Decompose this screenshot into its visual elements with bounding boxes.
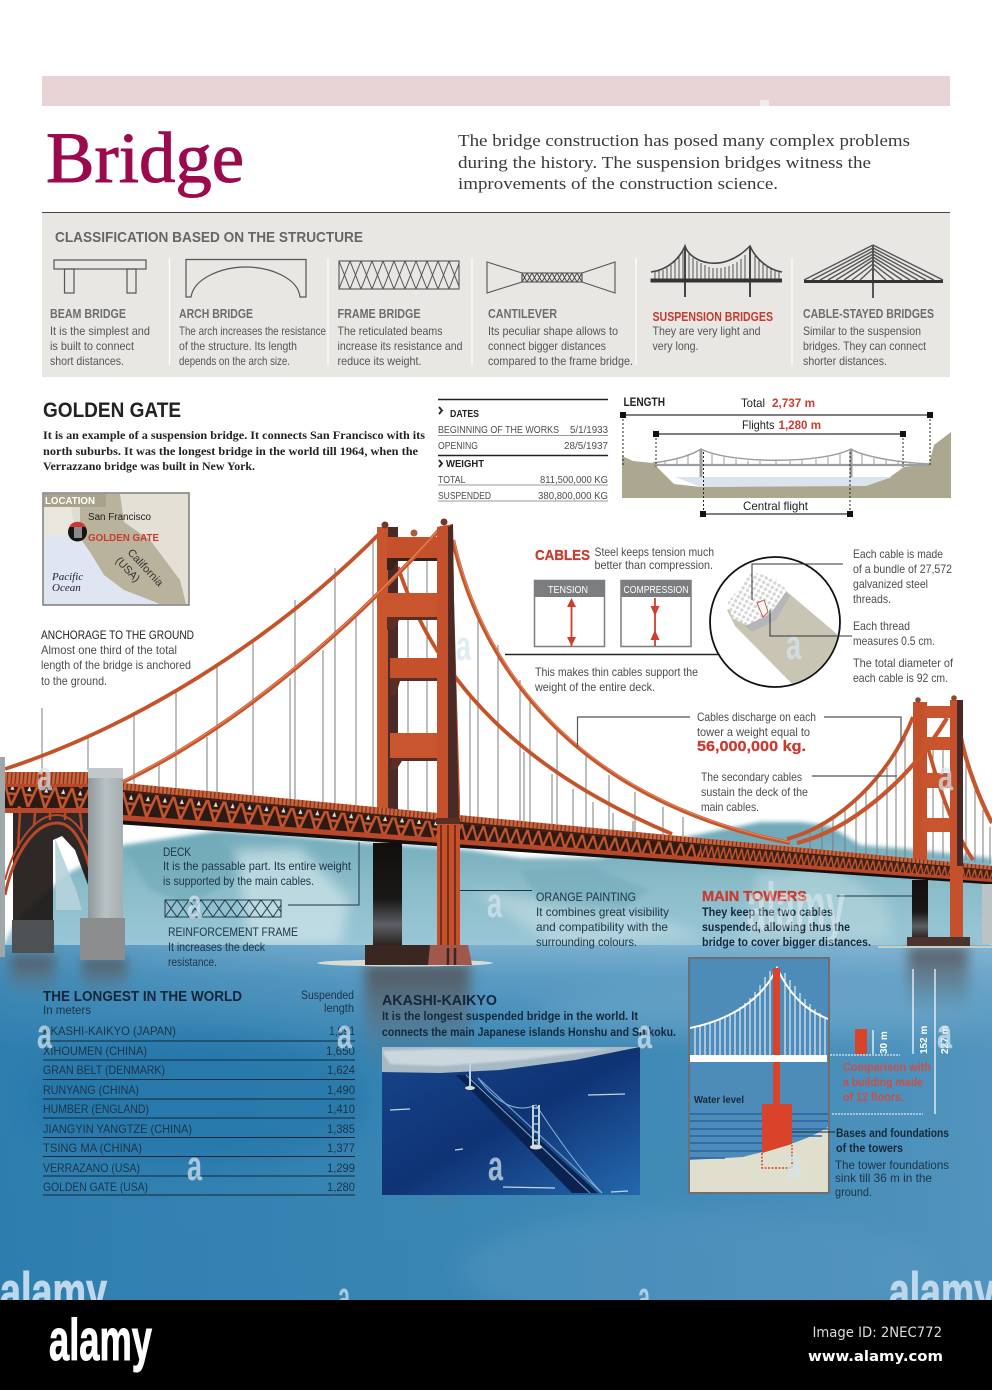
- watermarks: a: [337, 1010, 352, 1057]
- water band: [675, 477, 892, 487]
- watermarks: a: [938, 752, 953, 799]
- panel: cables: better than compression.: [594, 558, 713, 572]
- location map: (USA): [113, 555, 142, 585]
- row: jiangyin yangtze: JIANGYIN YANGTZE (CHINA): [43, 1122, 192, 1136]
- chart: length of the bridge: 1,280 m: [778, 418, 821, 432]
- row: verrazano: 1,299: [327, 1161, 355, 1175]
- row: akashi-kaikyo: AKASHI-KAIKYO (JAPAN): [43, 1024, 176, 1038]
- table: dates and weight: TOTAL: [438, 474, 466, 486]
- callout: main towers: [702, 888, 912, 949]
- callout: main towers: MAIN TOWERS: [702, 888, 807, 905]
- location map: GOLDEN GATE: [88, 532, 159, 544]
- text: cable-stayed bridges: Similar to the suspension: [803, 324, 921, 338]
- row: runyang: RUNYANG (CHINA): [43, 1083, 139, 1097]
- text: cable-stayed bridges: CABLE-STAYED BRIDGES: [803, 307, 934, 321]
- comparison caption: of 12 floors.: [843, 1090, 904, 1104]
- far right anchorage pier: [982, 884, 992, 944]
- intro text: The bridge construction has posed many complex problems: [458, 131, 910, 150]
- table: dates and weight: OPENING: [438, 440, 478, 452]
- row: humber: [43, 1102, 355, 1116]
- table: dates and weight: DATES: [450, 408, 479, 420]
- main cable: [690, 968, 828, 1028]
- text: cable composition: measures 0.5 cm.: [853, 634, 935, 648]
- illustration: golden gate bridge: [0, 518, 992, 966]
- text: anchorage to the ground: to the ground.: [41, 674, 107, 688]
- text: reinforcement frame: It increases the deck: [168, 940, 266, 954]
- map label: location: LOCATION: [45, 495, 95, 507]
- panel: cables: [505, 545, 954, 694]
- text: reinforcement frame: resistance.: [168, 955, 217, 969]
- callout: bases and foundations: The tower foundations: [835, 1158, 949, 1172]
- text: frame bridge: The reticulated beams: [338, 324, 442, 338]
- table: dates and weight: BEGINNING OF THE WORKS: [438, 424, 559, 436]
- table: the longest in the world: In meters: [43, 1003, 91, 1017]
- callout: bases and foundations: Bases and foundations: [836, 1126, 949, 1140]
- golden gate description: Verrazzano bridge was built in New York.: [43, 459, 255, 473]
- table: dates and weight: 28/5/1937: [564, 440, 608, 452]
- right tower front leg: [878, 695, 992, 948]
- row: tsing ma: 1,377: [327, 1141, 355, 1155]
- row: gran belt: GRAN BELT (DENMARK): [43, 1063, 165, 1077]
- golden gate description: [43, 428, 425, 473]
- watermarks: a: [338, 1273, 350, 1320]
- watermarks: a: [937, 1010, 952, 1057]
- text: akashi-kaikyo: [382, 993, 676, 1039]
- row: xihoumen: 1,650: [326, 1044, 355, 1058]
- row: tsing ma: TSING MA (CHINA): [43, 1141, 142, 1155]
- row: jiangyin yangtze: 1,385: [327, 1122, 355, 1136]
- footer image id: Image ID: 2NEC772: [812, 1325, 942, 1341]
- callout: main towers: suspended, allowing thus the: [702, 920, 850, 934]
- text: cantilever: compared to the frame bridge.: [488, 354, 633, 368]
- text: akashi-kaikyo: It is the longest suspended bridge in the world. It: [382, 1009, 638, 1023]
- callout: secondary cables: sustain the deck of the: [701, 785, 808, 799]
- watermarks: a: [786, 621, 801, 668]
- row: golden gate: GOLDEN GATE (USA): [43, 1180, 148, 1194]
- panel: cables: Steel keeps tension much: [594, 545, 714, 559]
- suspender cables: [695, 971, 825, 1055]
- row: golden gate: 1,280: [327, 1180, 355, 1194]
- callout: secondary cables: [701, 770, 897, 814]
- terrain profile: [622, 432, 951, 498]
- intro text: improvements of the construction science.: [458, 174, 778, 193]
- text: anchorage to the ground: [41, 628, 194, 688]
- icon: beam bridge: [54, 260, 146, 293]
- row: verrazano: VERRAZANO (USA): [43, 1161, 140, 1175]
- callout: orange painting: [460, 890, 669, 949]
- row: gran belt: 1,624: [327, 1063, 355, 1077]
- chart: length of the bridge: LENGTH: [624, 395, 665, 409]
- table: dates and weight: WEIGHT: [446, 458, 485, 470]
- near main cables: [123, 527, 992, 843]
- watermarks: [0, 621, 992, 1322]
- location map: Pacific: [51, 571, 83, 583]
- text: suspension bridges: SUSPENSION BRIDGES: [652, 310, 773, 324]
- text: suspension bridges: [652, 310, 773, 353]
- callout: orange painting: surrounding colours.: [536, 935, 637, 949]
- tension box: [534, 580, 605, 646]
- panel: classification based on the structure: [42, 212, 950, 377]
- text: beam bridge: is built to connect: [50, 339, 135, 353]
- text: anchorage to the ground: length of the bridge is anchored: [41, 658, 191, 672]
- comparison of heights: [830, 969, 951, 1114]
- text: cable composition: galvanized steel: [853, 577, 928, 591]
- comparison of heights: 30 m: [879, 1031, 890, 1054]
- text: cable composition: of a bundle of 27,572: [853, 562, 952, 576]
- text: cable-stayed bridges: shorter distances.: [803, 354, 887, 368]
- compression box: COMPRESSION: [624, 585, 688, 596]
- watermarks: alamy: [747, 869, 845, 945]
- watermarks: a: [637, 1010, 652, 1057]
- row: gran belt: [43, 1063, 355, 1077]
- chart: length of the bridge: Total: [741, 396, 765, 410]
- callout: deck: [163, 842, 359, 905]
- tension box: TENSION: [548, 585, 588, 596]
- text: arch bridge: [179, 307, 326, 368]
- text: reinforcement frame: REINFORCEMENT FRAME: [168, 925, 298, 939]
- right tower struts: [922, 706, 954, 832]
- location map: [43, 493, 189, 605]
- row: humber: 1,410: [327, 1102, 355, 1116]
- callout: main towers: bridge to cover bigger distances.: [702, 935, 871, 949]
- table: the longest in the world: Suspended: [301, 988, 354, 1002]
- watermarks: a: [638, 1273, 650, 1320]
- golden gate description: north suburbs. It was the longest bridge in the world till 1964, when the: [43, 444, 419, 458]
- text: akashi-kaikyo: connects the main Japanese islands Honshu and Shikoku.: [382, 1025, 676, 1039]
- label: water level: Water level: [694, 1094, 744, 1106]
- text: anchorage to the ground: ANCHORAGE TO THE GROUND: [41, 628, 194, 642]
- callout: deck: It is the passable part. Its entire weight: [163, 859, 352, 873]
- callout: secondary cables: main cables.: [701, 800, 759, 814]
- callout: orange painting: ORANGE PAINTING: [536, 890, 636, 904]
- row: verrazano: [43, 1161, 355, 1175]
- text: cable-stayed bridges: [803, 307, 934, 368]
- inset: tower foundations diagram: [689, 958, 829, 1193]
- chart: length of the bridge: [620, 395, 951, 517]
- text: arch bridge: depends on the arch size.: [179, 354, 290, 368]
- callout: deck: DECK: [163, 845, 191, 859]
- photo: akashi-kaikyo bridge: [382, 1047, 640, 1195]
- callout: deck: is supported by the main cables.: [163, 874, 314, 888]
- cables heading: CABLES: [535, 547, 590, 564]
- row: akashi-kaikyo: [43, 1024, 355, 1038]
- text: anchorage to the ground: Almost one third of the total: [41, 643, 177, 657]
- table: dates and weight: 811,500,000 KG: [540, 474, 608, 486]
- text: reinforcement frame: [168, 925, 298, 969]
- watermarks: a: [187, 1142, 202, 1189]
- callout: cables discharge: Cables discharge on each: [697, 710, 816, 724]
- water level lines: [690, 1114, 828, 1158]
- text: cable composition: The total diameter of: [853, 656, 954, 670]
- icon: cable-stayed bridge: [804, 245, 943, 298]
- comparison of heights: 227 m: [940, 1026, 951, 1054]
- text: cable composition: Each thread: [853, 619, 910, 633]
- callout: bases and foundations: of the towers: [836, 1141, 903, 1155]
- building block: [855, 1029, 867, 1054]
- watermarks: a: [37, 1010, 52, 1057]
- far tower leg, main tower: [373, 522, 402, 945]
- row: akashi-kaikyo: 1,991: [329, 1024, 355, 1038]
- chart: length of the bridge: 2,737 m: [772, 396, 815, 410]
- callout: main towers: They keep the two cables: [702, 905, 833, 919]
- callout: cables discharge: tower a weight equal to: [697, 725, 810, 739]
- callout: bases and foundations: [792, 1126, 949, 1199]
- footer bar: [0, 1300, 992, 1390]
- text: cantilever: connect bigger distances: [488, 339, 606, 353]
- row: xihoumen: [43, 1044, 355, 1058]
- deck: [690, 1055, 827, 1062]
- text: frame bridge: FRAME BRIDGE: [338, 307, 420, 321]
- watermarks: a: [456, 622, 471, 669]
- anchorage arch span: [0, 757, 125, 960]
- text: thin cables: weight of the entire deck.: [534, 680, 655, 694]
- text: cable composition: Each cable is made: [853, 547, 943, 561]
- background scene: mountains and water: [0, 822, 992, 1330]
- panel heading: CLASSIFICATION BASED ON THE STRUCTURE: [55, 229, 363, 246]
- icon: arch bridge: [186, 260, 306, 297]
- table: dates and weight: [438, 400, 608, 502]
- right tower back leg: [912, 697, 928, 938]
- watermarks: a: [487, 879, 502, 926]
- cable cross section: [710, 557, 852, 692]
- table: the longest in the world: [43, 988, 355, 1195]
- text: frame bridge: [338, 307, 462, 368]
- text: akashi-kaikyo: AKASHI-KAIKYO: [382, 993, 497, 1009]
- text: suspension bridges: very long.: [652, 339, 698, 353]
- table: the longest in the world: THE LONGEST IN THE WORLD: [43, 989, 242, 1005]
- watermarks: a: [787, 1140, 802, 1187]
- ground: [690, 1127, 828, 1192]
- text: cantilever: Its peculiar shape allows to: [488, 324, 618, 338]
- comparison caption: a building made: [843, 1075, 923, 1089]
- comparison caption: [843, 1060, 931, 1104]
- callout: orange painting: and compatibility with the: [536, 920, 668, 934]
- icon: suspension bridge: [650, 246, 782, 297]
- map marker: [68, 522, 87, 542]
- callout: cables discharge: [578, 710, 901, 755]
- location map: California: [125, 547, 166, 590]
- far main cables: [5, 528, 973, 860]
- main tower struts: [387, 530, 438, 770]
- main tower front leg: [317, 518, 493, 966]
- compression box: [620, 580, 692, 646]
- watermarks: a: [37, 752, 52, 799]
- watermarks: a: [488, 1142, 503, 1189]
- title: Bridge: [46, 118, 244, 198]
- icon: cantilever: [487, 262, 615, 293]
- location map: Ocean: [52, 582, 81, 594]
- bridge profile: [653, 449, 930, 477]
- text: cable composition: each cable is 92 cm.: [853, 671, 948, 685]
- text: beam bridge: It is the simplest and: [50, 324, 150, 338]
- chart: length of the bridge: Flights: [742, 418, 774, 432]
- text: arch bridge: The arch increases the resistance: [179, 324, 326, 338]
- row: jiangyin yangtze: [43, 1122, 355, 1136]
- text: arch bridge: of the structure. Its length: [179, 339, 297, 353]
- text: cable composition: [853, 547, 954, 685]
- text: arch bridge: ARCH BRIDGE: [179, 307, 253, 321]
- tower: [762, 968, 792, 1153]
- text: cantilever: [488, 307, 633, 368]
- watermarks: a: [187, 880, 202, 927]
- text: beam bridge: [50, 307, 150, 368]
- text: thin cables: [534, 665, 698, 694]
- callout: cables discharge: 56,000,000 kg.: [697, 738, 806, 755]
- callout: orange painting: It combines great visibility: [536, 905, 669, 919]
- icon: frame bridge: [339, 261, 459, 289]
- comparison caption: Comparison with: [843, 1060, 931, 1074]
- comparison of heights: 152 m: [919, 1026, 930, 1054]
- callout: secondary cables: The secondary cables: [701, 770, 802, 784]
- text: beam bridge: short distances.: [50, 354, 124, 368]
- text: cantilever: CANTILEVER: [488, 307, 557, 321]
- golden gate description: It is an example of a suspension bridge. It connects San Francisco with its: [43, 428, 425, 442]
- deck: [123, 783, 992, 884]
- row: tsing ma: [43, 1141, 355, 1155]
- location map: San Francisco: [88, 512, 151, 523]
- text: cable composition: threads.: [853, 592, 891, 606]
- header band: [42, 76, 950, 106]
- row: runyang: [43, 1083, 355, 1097]
- watermarks: alamy: [0, 1262, 107, 1322]
- text: suspension bridges: They are very light and: [652, 324, 760, 338]
- text: thin cables: This makes thin cables support the: [535, 665, 698, 679]
- intro text: [458, 131, 910, 193]
- row: humber: HUMBER (ENGLAND): [43, 1102, 149, 1116]
- heading: golden gate: GOLDEN GATE: [43, 399, 181, 422]
- text: frame bridge: increase its resistance and: [338, 339, 462, 353]
- text: beam bridge: BEAM BRIDGE: [50, 307, 126, 321]
- row: runyang: 1,490: [327, 1083, 355, 1097]
- table: dates and weight: 380,800,000 KG: [538, 490, 608, 502]
- text: frame bridge: reduce its weight.: [338, 354, 422, 368]
- table: the longest in the world: length: [324, 1001, 354, 1015]
- intro text: during the history. The suspension bridges witness the: [458, 153, 871, 172]
- far suspenders: [42, 538, 990, 864]
- footer url: www.alamy.com: [808, 1349, 943, 1365]
- table: dates and weight: SUSPENDED: [438, 490, 491, 502]
- row: xihoumen: XIHOUMEN (CHINA): [43, 1044, 147, 1058]
- callout: bases and foundations: ground.: [835, 1185, 872, 1199]
- table: dates and weight: 5/1/1933: [570, 424, 608, 436]
- callout: bases and foundations: sink till 36 m in the: [835, 1171, 932, 1185]
- chart: length of the bridge: Central flight: [743, 499, 809, 513]
- footer logo: alamy: [49, 1308, 152, 1373]
- icon: reinforcement frame: [165, 900, 281, 917]
- row: golden gate: [43, 1180, 355, 1194]
- text: cable-stayed bridges: bridges. They can connect: [803, 339, 927, 353]
